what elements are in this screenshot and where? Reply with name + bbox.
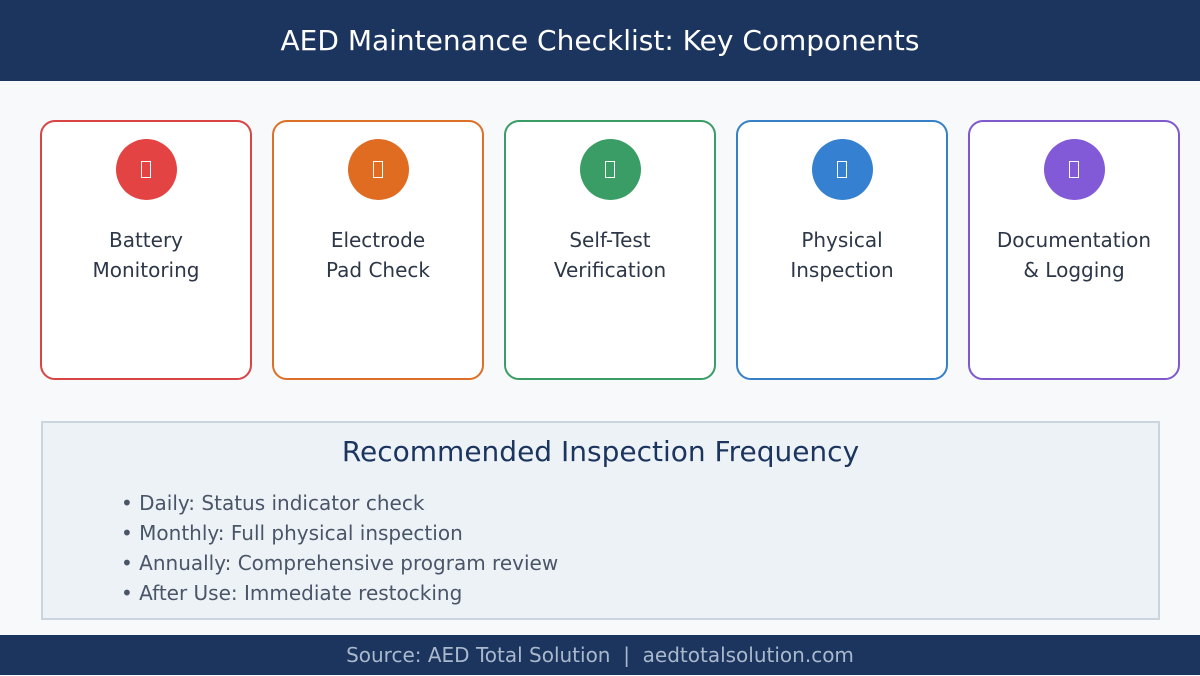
card: physical — [736, 120, 948, 380]
label: Electrode — [331, 228, 425, 252]
list: • After Use: Immediate restocking — [121, 581, 462, 605]
label: Verification — [554, 258, 666, 282]
icon: documentation — [1044, 139, 1104, 200]
card: electrode — [272, 120, 484, 380]
icon: self-test — [580, 139, 640, 200]
label: Monitoring — [93, 258, 199, 282]
card: documentation — [968, 120, 1180, 380]
panel: frequency — [41, 421, 1160, 620]
list: • Monthly: Full physical inspection — [121, 521, 463, 545]
list — [121, 491, 558, 605]
footer: Source: AED Total Solution | aedtotalsolution.com — [346, 643, 854, 667]
label: Documentation — [997, 228, 1151, 252]
label: & Logging — [1023, 258, 1125, 282]
label — [554, 228, 666, 282]
heading: Recommended Inspection Frequency — [342, 435, 859, 468]
label: Self-Test — [569, 228, 651, 252]
card: self-test — [504, 120, 716, 380]
label — [326, 228, 430, 282]
list: • Daily: Status indicator check — [121, 491, 424, 515]
label: Battery — [109, 228, 183, 252]
label — [790, 228, 894, 282]
icon: physical — [812, 139, 872, 200]
label — [93, 228, 199, 282]
title: AED Maintenance Checklist: Key Components — [281, 24, 919, 57]
label: Inspection — [790, 258, 894, 282]
icon: electrode — [348, 139, 408, 200]
icon: battery — [116, 139, 176, 200]
label — [997, 228, 1151, 282]
label: Physical — [801, 228, 883, 252]
label: Pad Check — [326, 258, 430, 282]
list: • Annually: Comprehensive program review — [121, 551, 558, 575]
title — [0, 0, 1200, 81]
footer — [0, 635, 1200, 675]
card: battery — [40, 120, 252, 380]
